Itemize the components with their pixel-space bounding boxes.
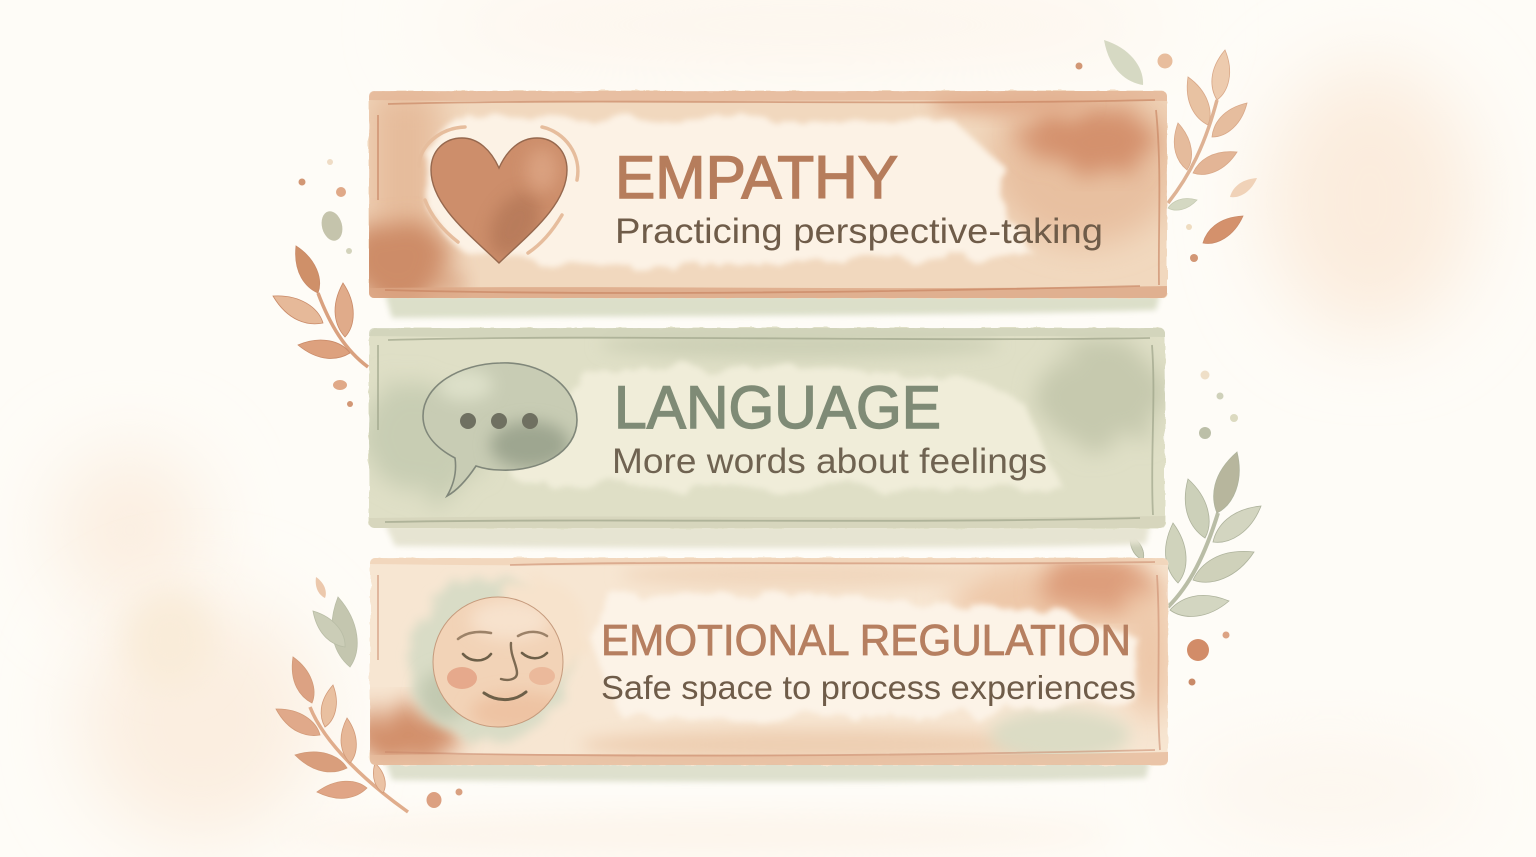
heading: language: LANGUAGE	[614, 374, 941, 441]
heading: empathy: EMPATHY	[615, 144, 898, 211]
text: emotional regulation subtitle: Safe space to process experiences	[601, 669, 1136, 706]
dots: right side	[1187, 370, 1238, 686]
panel: emotional regulation	[355, 558, 1172, 782]
text: language subtitle: More words about feelings	[612, 442, 1047, 481]
heading: emotional regulation: EMOTIONAL REGULATION	[601, 616, 1131, 665]
panel: language	[365, 328, 1165, 548]
leaf and dots: above first panel	[1076, 33, 1198, 262]
panel: empathy	[350, 75, 1180, 318]
sprig: middle right	[1126, 449, 1267, 620]
dots: bottom left	[426, 788, 462, 808]
sprig: green, left of third panel	[307, 575, 362, 669]
sprig: bottom left	[272, 654, 408, 812]
sprig: top left	[268, 242, 368, 367]
icon: calm face	[408, 578, 585, 742]
dots: left of first panel	[298, 159, 353, 407]
icon: speech bubble	[423, 363, 577, 496]
text: empathy subtitle: Practicing perspective-taking	[615, 212, 1103, 251]
sprig: top right	[1167, 49, 1260, 250]
icon: heart	[419, 127, 578, 265]
